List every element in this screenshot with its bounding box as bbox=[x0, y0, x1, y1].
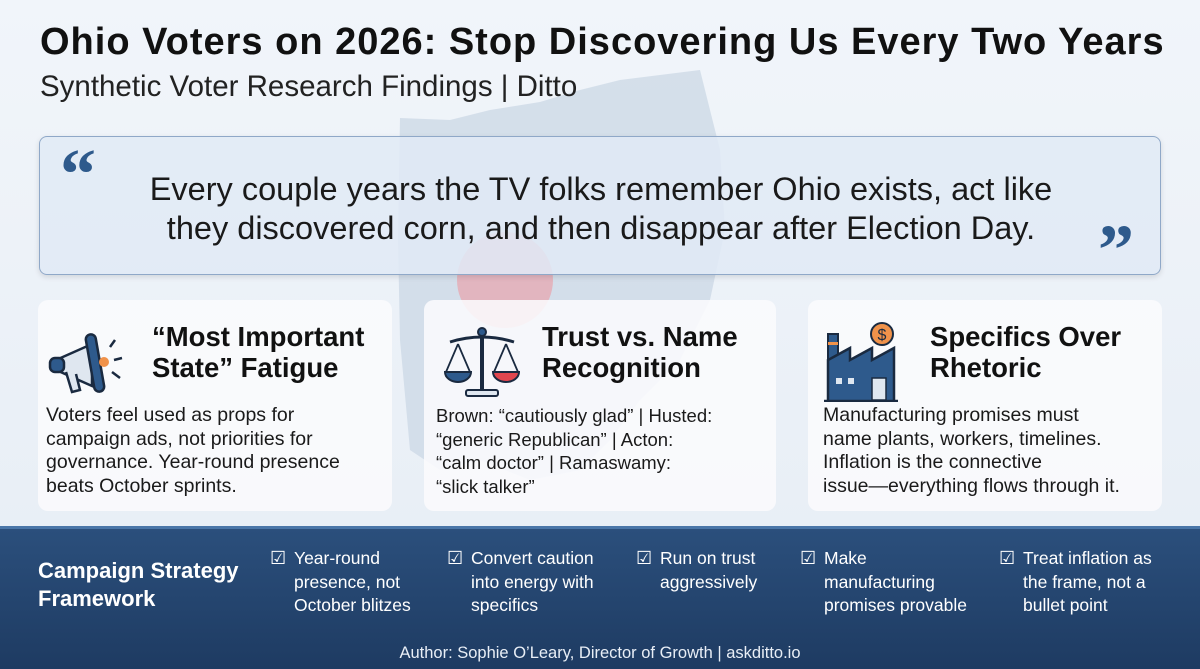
open quote mark: “ bbox=[60, 134, 96, 214]
body text: Brown: “cautiously glad” | Husted: bbox=[436, 405, 712, 426]
strategy item 2 bbox=[447, 548, 594, 615]
heading: State” Fatigue bbox=[152, 352, 338, 383]
body text: beats October sprints. bbox=[46, 474, 237, 496]
icon: megaphone bbox=[48, 333, 122, 394]
heading: Specifics Over bbox=[930, 321, 1121, 352]
heading: Rhetoric bbox=[930, 352, 1042, 383]
title: Ohio Voters on 2026: Stop Discovering Us Every Two Years bbox=[40, 21, 1165, 63]
framework heading: Campaign Strategy bbox=[38, 558, 238, 583]
strategy item 2: specifics bbox=[471, 595, 538, 615]
body text: issue—everything flows through it. bbox=[823, 474, 1120, 496]
body text: Inflation is the connective bbox=[823, 451, 1042, 473]
strategy item 3 bbox=[636, 548, 758, 592]
body text: “slick talker” bbox=[436, 476, 535, 496]
quote text bbox=[150, 171, 1052, 246]
strategy item 5: ☑ bbox=[999, 548, 1015, 568]
strategy item 4: Make bbox=[824, 548, 867, 568]
strategy item 1: October blitzes bbox=[294, 595, 411, 615]
strategy item 2: into energy with bbox=[471, 572, 594, 592]
body text bbox=[46, 404, 340, 496]
body text bbox=[823, 404, 1120, 496]
body text: “generic Republican” | Acton: bbox=[436, 428, 673, 450]
strategy item 5: Treat inflation as bbox=[1023, 548, 1152, 568]
heading bbox=[542, 321, 738, 383]
strategy item 2: Convert caution bbox=[471, 548, 594, 568]
strategy item 3: aggressively bbox=[660, 572, 757, 592]
panel: specifics over rhetoric bbox=[808, 300, 1162, 511]
framework heading bbox=[38, 558, 238, 611]
body text: Voters feel used as props for bbox=[46, 404, 294, 426]
background: Ohio map silhouette bbox=[398, 70, 716, 459]
panel: most important state fatigue bbox=[38, 300, 392, 511]
icon: scales bbox=[444, 327, 520, 397]
quote text: Every couple years the TV folks remember Ohio exists, act like bbox=[150, 171, 1052, 207]
icon: factory with dollar: $ bbox=[878, 327, 887, 344]
quote text: they discovered corn, and then disappear after Election Day. bbox=[167, 210, 1035, 246]
strategy item 1: ☑ bbox=[270, 548, 286, 568]
body text: campaign ads, not priorities for bbox=[46, 428, 313, 450]
subtitle: Synthetic Voter Research Findings | Ditto bbox=[40, 70, 577, 103]
strategy item 4: manufacturing bbox=[824, 572, 935, 592]
strategy item 2: ☑ bbox=[447, 548, 463, 568]
body text bbox=[436, 405, 712, 496]
strategy item 1: presence, not bbox=[294, 572, 400, 592]
body text: Manufacturing promises must bbox=[823, 404, 1079, 426]
strategy item 5 bbox=[999, 548, 1152, 615]
heading: Trust vs. Name bbox=[542, 321, 738, 352]
author line: Author: Sophie O’Leary, Director of Growth | askditto.io bbox=[399, 644, 801, 662]
strategy item 3: Run on trust bbox=[660, 548, 755, 568]
panel: trust vs name recognition bbox=[424, 300, 776, 511]
strategy item 5: the frame, not a bbox=[1023, 572, 1146, 592]
heading bbox=[930, 321, 1121, 383]
body text: governance. Year-round presence bbox=[46, 451, 340, 473]
body text: “calm doctor” | Ramaswamy: bbox=[436, 452, 671, 473]
quote box bbox=[39, 136, 1161, 275]
body text: name plants, workers, timelines. bbox=[823, 428, 1102, 450]
close quote mark: ” bbox=[1098, 210, 1134, 290]
strategy item 1 bbox=[270, 548, 411, 615]
strategy item 5: bullet point bbox=[1023, 595, 1108, 615]
icon: factory with dollar bbox=[824, 322, 898, 402]
strategy item 4: ☑ bbox=[800, 548, 816, 568]
footer band: campaign strategy framework bbox=[0, 526, 1200, 669]
heading: “Most Important bbox=[152, 321, 364, 352]
heading bbox=[152, 321, 364, 383]
heading: Recognition bbox=[542, 352, 701, 383]
strategy item 4: promises provable bbox=[824, 595, 967, 615]
strategy item 3: ☑ bbox=[636, 548, 652, 568]
strategy item 4 bbox=[800, 548, 967, 615]
strategy item 1: Year-round bbox=[294, 548, 380, 568]
framework heading: Framework bbox=[38, 586, 155, 611]
